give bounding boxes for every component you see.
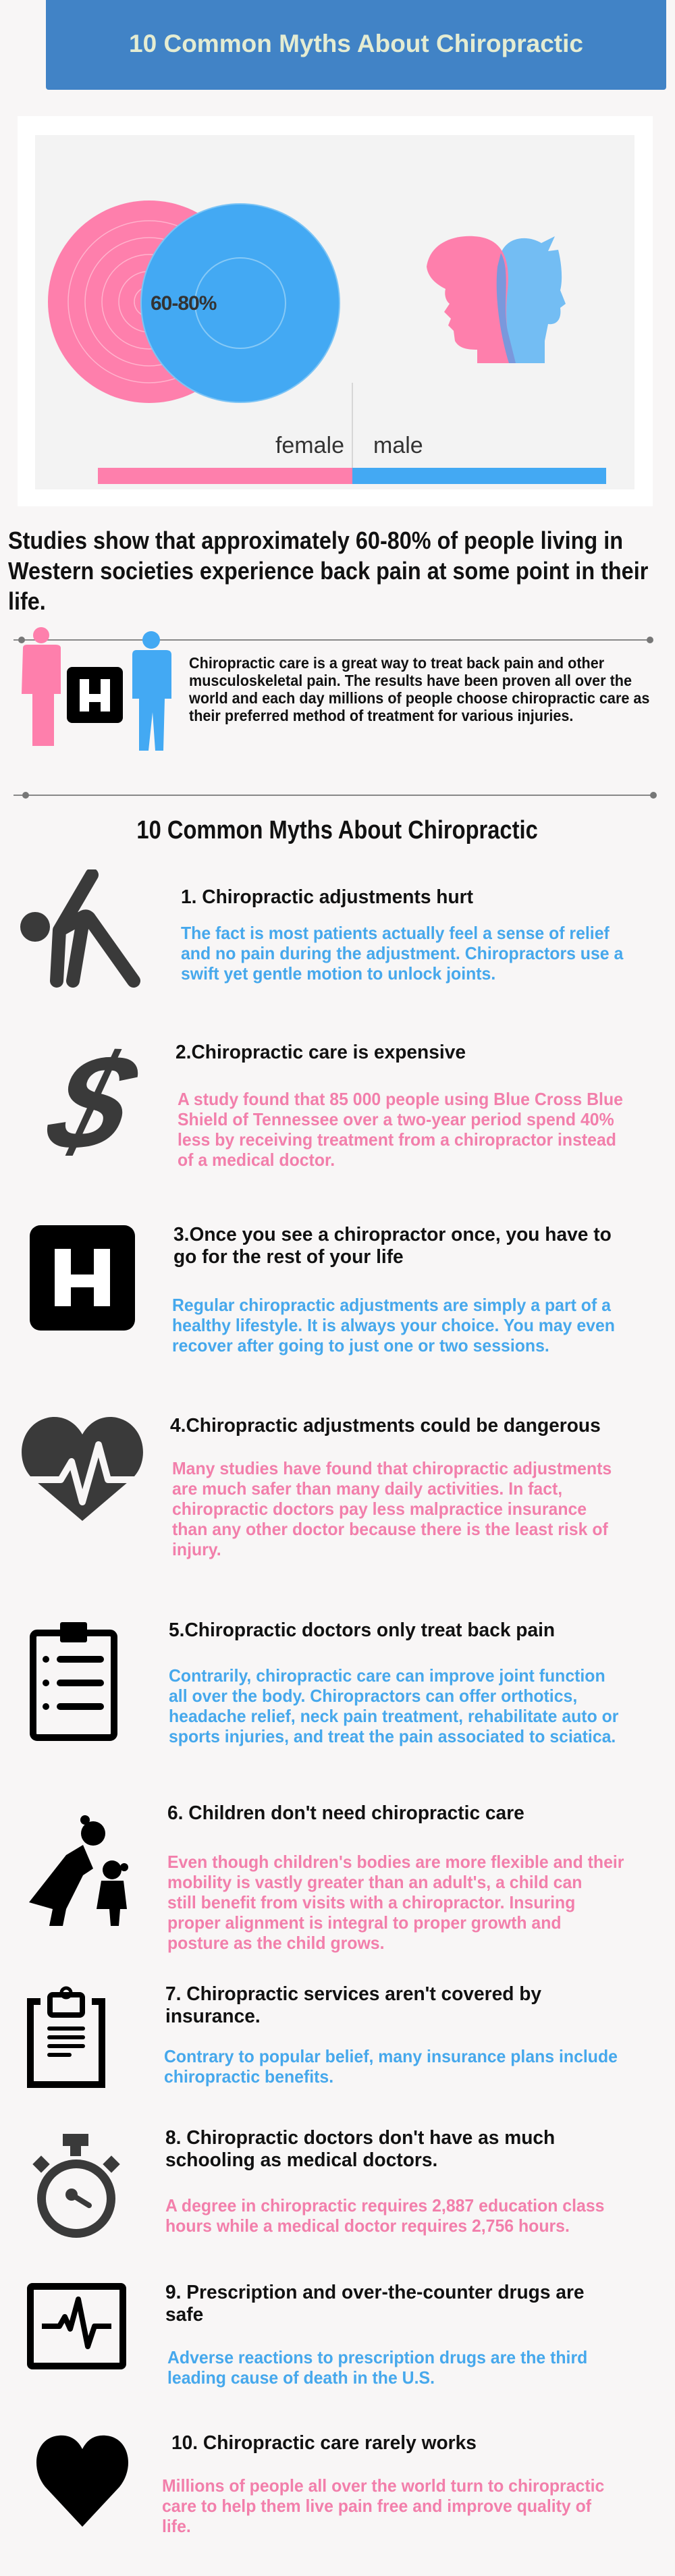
body: A study found that 85 000 people using Blue Cross Blue <box>178 1089 623 1109</box>
text: study statistic: life. <box>8 587 46 615</box>
heading <box>173 1224 612 1268</box>
myth 9 <box>27 2282 587 2388</box>
heading <box>165 1983 541 2027</box>
labels: female <box>275 433 344 458</box>
text: intro: Chiropractic care is a great way to treat back pain and other <box>189 654 604 672</box>
body: swift yet gentle motion to unlock joints. <box>181 963 495 984</box>
panel: gender statistic <box>18 116 653 506</box>
body <box>181 923 624 984</box>
body: still benefit from visits with a chiropractor. Insuring <box>167 1892 575 1912</box>
body <box>165 2195 604 2236</box>
body: of a medical doctor. <box>178 1150 335 1170</box>
body: all over the body. Chiropractors can offer orthotics, <box>169 1686 577 1706</box>
body: posture as the child grows. <box>167 1933 384 1953</box>
icon: heart <box>36 2436 128 2527</box>
divider line <box>352 383 353 483</box>
body: chiropractic benefits. <box>164 2066 333 2087</box>
heading: 3.Once you see a chiropractor once, you have to <box>173 1224 612 1245</box>
text: study statistic: Studies show that approximately 60-80% of people living in <box>8 527 623 554</box>
body: hours while a medical doctor requires 2,756 hours. <box>165 2216 570 2236</box>
icon: monitor with pulse <box>27 2283 126 2369</box>
icon: checklist clipboard <box>30 1622 117 1741</box>
heading <box>165 2282 585 2326</box>
myth 4 <box>22 1415 612 1559</box>
labels <box>275 433 423 458</box>
myth 10 <box>36 2432 604 2536</box>
heading: 10. Chiropractic care rarely works <box>171 2432 477 2454</box>
percentage label: 60-80% <box>151 292 217 315</box>
bars <box>98 468 606 484</box>
text: intro: musculoskeletal pain. The results have been proven all over the <box>189 672 632 689</box>
myth 3 <box>30 1224 615 1356</box>
section heading: 10 Common Myths About Chiropractic <box>136 816 538 844</box>
body: headache relief, neck pain treatment, rehabilitate auto or <box>169 1706 618 1726</box>
heading: go for the rest of your life <box>173 1246 404 1268</box>
heading: 1. Chiropractic adjustments hurt <box>181 886 473 908</box>
body <box>162 2475 604 2536</box>
body: recover after going to just one or two sessions. <box>172 1335 549 1356</box>
heading <box>165 2127 555 2171</box>
body: proper alignment is integral to proper growth and <box>167 1912 562 1933</box>
icon: hospital H <box>30 1225 135 1331</box>
body: than any other doctor because there is the least risk of <box>172 1519 608 1539</box>
body: and no pain during the adjustment. Chiropractors use a <box>181 943 623 963</box>
icon: people and hospital <box>22 627 171 751</box>
heading: safe <box>165 2304 203 2326</box>
myth 5 <box>30 1619 618 1746</box>
heading: 7. Chiropractic services aren't covered by <box>165 1983 541 2005</box>
pink circle <box>48 200 250 403</box>
body: life. <box>162 2516 191 2536</box>
title banner: 10 Common Myths About Chiropractic <box>129 30 583 57</box>
body: leading cause of death in the U.S. <box>167 2367 435 2388</box>
heading: 4.Chiropractic adjustments could be dangerous <box>170 1415 601 1437</box>
heading: schooling as medical doctors. <box>165 2149 437 2171</box>
body <box>167 1852 624 1953</box>
text: study statistic <box>8 527 648 615</box>
text: intro <box>189 654 649 724</box>
heading: 5.Chiropractic doctors only treat back pain <box>169 1619 555 1641</box>
icon: heads <box>427 236 566 363</box>
myth 8 <box>32 2127 604 2238</box>
body: Contrarily, chiropractic care can improve joint function <box>169 1665 605 1686</box>
body: are much safer than many daily activities. In fact, <box>172 1478 562 1499</box>
body: A degree in chiropractic requires 2,887 education class <box>165 2195 604 2216</box>
icon: heart with pulse <box>22 1417 143 1521</box>
myth 6 <box>29 1802 624 1953</box>
heading: 2.Chiropractic care is expensive <box>176 1042 466 1063</box>
body: sports injuries, and treat the pain associated to sciatica. <box>169 1726 616 1746</box>
labels: male <box>373 433 423 458</box>
chart area <box>35 135 634 489</box>
body: Shield of Tennessee over a two-year period spend 40% <box>178 1109 614 1129</box>
myth 7 <box>27 1983 618 2088</box>
body <box>167 2347 587 2388</box>
icon: document clipboard <box>27 1986 105 2088</box>
body <box>169 1665 618 1746</box>
body: care to help them live pain free and improve quality of <box>162 2496 591 2516</box>
body <box>172 1295 615 1356</box>
body: Many studies have found that chiropractic adjustments <box>172 1458 612 1478</box>
body: chiropractic doctors pay less malpractice insurance <box>172 1499 587 1519</box>
icon: stopwatch <box>32 2134 120 2238</box>
body: mobility is vastly greater than an adult's, a child can <box>167 1872 582 1892</box>
text: study statistic: Western societies experience back pain at some point in their <box>8 557 648 585</box>
heading: 8. Chiropractic doctors don't have as much <box>165 2127 555 2149</box>
myth 2 <box>33 1042 623 1170</box>
myth 1 <box>20 869 624 988</box>
body: injury. <box>172 1539 221 1559</box>
icon: mother and child <box>29 1815 128 1926</box>
body: Regular chiropractic adjustments are simply a part of a <box>172 1295 611 1315</box>
text: intro: world and each day millions of people choose chiropractic care as <box>189 689 649 707</box>
icon: stretching person <box>20 869 140 988</box>
body <box>172 1458 612 1559</box>
heading: insurance. <box>165 2006 261 2027</box>
body: healthy lifestyle. It is always your choice. You may even <box>172 1315 615 1335</box>
body <box>164 2046 618 2087</box>
body <box>178 1089 623 1170</box>
heading: 9. Prescription and over-the-counter drugs are <box>165 2282 585 2303</box>
body: less by receiving treatment from a chiropractor instead <box>178 1129 616 1150</box>
title banner <box>46 0 666 90</box>
text: intro: their preferred method of treatment for various injuries. <box>189 707 573 724</box>
heading: 6. Children don't need chiropractic care <box>167 1802 524 1824</box>
blue circle <box>141 204 340 402</box>
body: Adverse reactions to prescription drugs are the third <box>167 2347 587 2367</box>
body: Contrary to popular belief, many insurance plans include <box>164 2046 618 2066</box>
body: Millions of people all over the world turn to chiropractic <box>162 2475 604 2496</box>
body: Even though children's bodies are more flexible and their <box>167 1852 624 1872</box>
body: The fact is most patients actually feel a sense of relief <box>181 923 610 943</box>
